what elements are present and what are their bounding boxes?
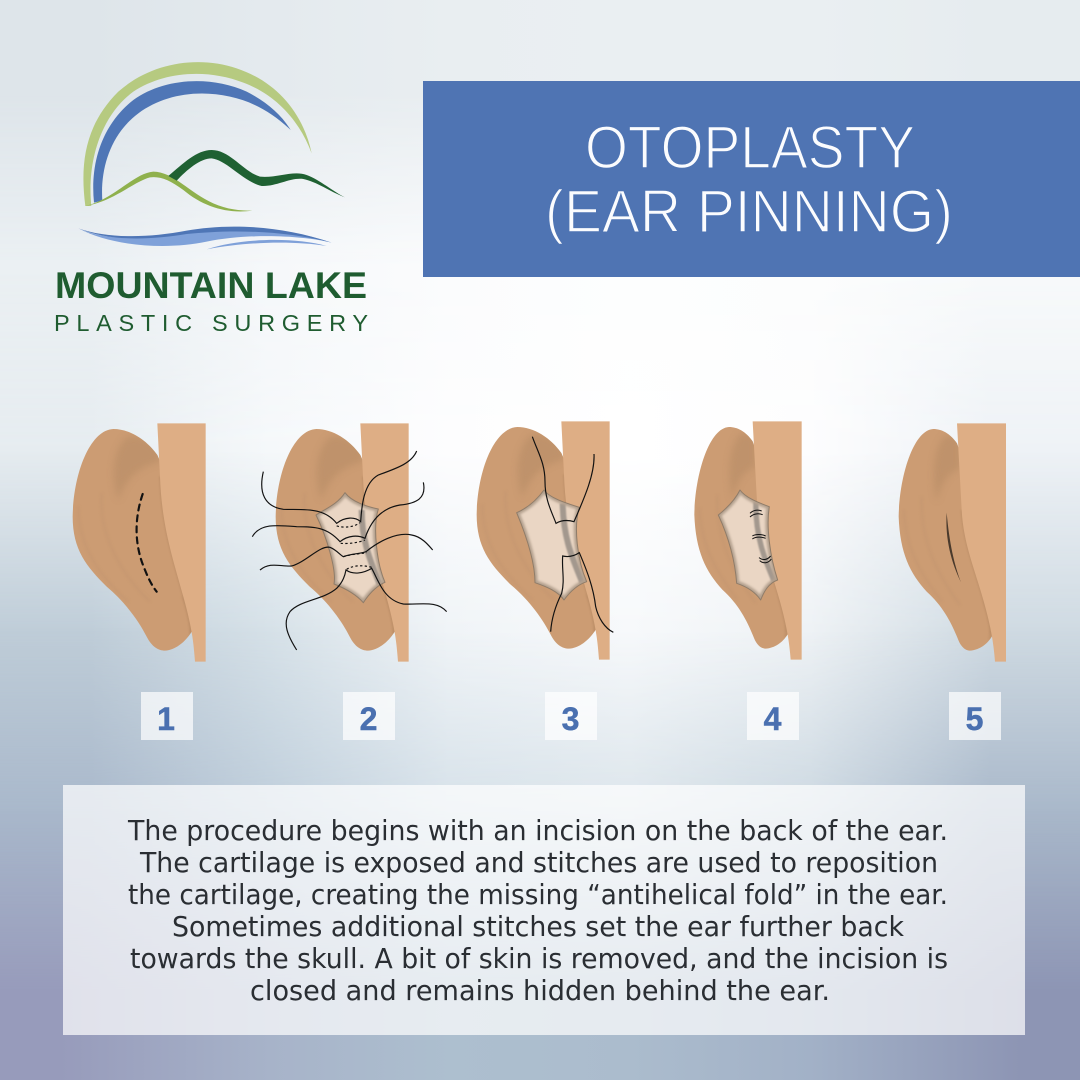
illustration step 5: healed ear with hidden scar (899, 423, 1006, 662)
badge 1 (141, 692, 193, 740)
title text: (EAR PINNING) (545, 178, 953, 245)
description panel (63, 785, 1025, 1035)
description text (127, 814, 948, 1007)
badge 5 (949, 692, 1001, 740)
description text: Sometimes additional stitches set the ear further back (172, 910, 905, 943)
badge 2: 2 (360, 701, 377, 737)
badge 2 (343, 692, 395, 740)
description text: the cartilage, creating the missing “antihelical fold” in the ear. (128, 878, 948, 911)
illustration step 2: exposed cartilage with sutures (252, 423, 447, 662)
title text (545, 114, 953, 245)
logo wordmark: MOUNTAIN LAKE (55, 265, 367, 306)
logo mark: arcs, mountains and lake (78, 62, 345, 249)
badge 4 (747, 692, 799, 740)
badge 3 (545, 692, 597, 740)
badge 3: 3 (562, 701, 579, 737)
logo: Mountain Lake Plastic Surgery (54, 62, 368, 336)
title text: OTOPLASTY (585, 114, 915, 181)
description text: closed and remains hidden behind the ear. (250, 974, 830, 1007)
step number badges (141, 692, 1001, 740)
illustration step 3: cartilage fold with two sutures (477, 421, 613, 660)
badge 4: 4 (764, 701, 782, 737)
description text: The procedure begins with an incision on the back of the ear. (127, 814, 948, 847)
description text: towards the skull. A bit of skin is removed, and the incision is (130, 942, 948, 975)
badge 1: 1 (157, 701, 175, 737)
illustration step 1: dashed incision line (73, 423, 206, 662)
description text: The cartilage is exposed and stitches are used to reposition (139, 846, 938, 879)
illustration step 4: closed stitches over fold (694, 421, 802, 660)
badge 5: 5 (966, 701, 983, 737)
title banner (423, 81, 1080, 277)
logo tagline: PLASTIC SURGERY (54, 310, 368, 336)
